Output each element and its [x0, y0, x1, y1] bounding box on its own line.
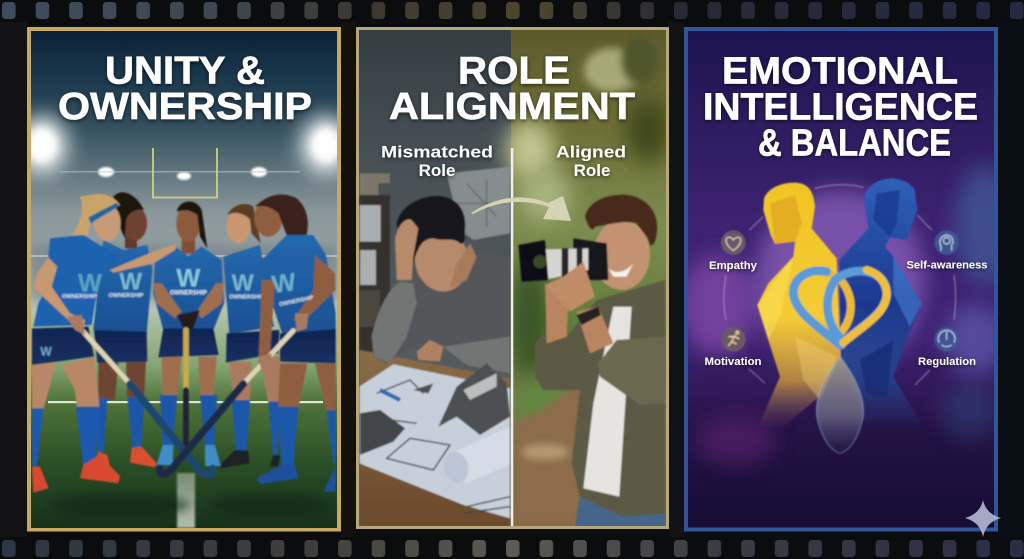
icon: sparkle watermark	[965, 500, 1001, 537]
title: emotional intelligence and balance: & BALANCE	[758, 122, 951, 164]
blueprint sheet	[359, 364, 510, 518]
player 5: OWNERSHIP	[279, 295, 314, 308]
player 3, centre: W	[176, 264, 200, 292]
title: unity and ownership	[58, 50, 312, 128]
panel: role alignment	[358, 28, 670, 528]
label: self-awareness: Self-awareness	[906, 260, 988, 272]
photographer hand and watch	[545, 262, 601, 325]
player 5: W	[270, 268, 298, 299]
label: mismatched role	[381, 142, 493, 180]
player 1: OWNERSHIP	[62, 294, 97, 300]
label: empathy: Empathy	[709, 260, 758, 272]
icon: runner	[728, 331, 739, 346]
title: role alignment: ROLE	[458, 50, 570, 92]
title: emotional intelligence and balance: EMOTIONAL	[722, 50, 958, 92]
title: unity and ownership: UNITY &	[105, 50, 265, 92]
label: mismatched role: Mismatched	[381, 142, 493, 162]
connecting arcs	[724, 185, 956, 385]
player 2: W	[119, 268, 142, 295]
title: role alignment	[389, 50, 635, 128]
aligned side background	[506, 30, 670, 526]
player 1: W	[40, 345, 52, 359]
photographer jacket and body	[535, 280, 665, 527]
player 2: OWNERSHIP	[109, 293, 144, 299]
player 4: OWNERSHIP	[229, 295, 264, 301]
panel frame: blue	[686, 29, 996, 530]
panel frame: olive gold	[358, 28, 668, 528]
panel: emotional intelligence and balance	[680, 29, 1015, 530]
player 4	[220, 204, 280, 469]
title: unity and ownership: OWNERSHIP	[58, 86, 312, 128]
arrow: mismatched to aligned	[471, 196, 571, 221]
nebula background	[680, 165, 1015, 465]
rolled plan	[444, 427, 510, 482]
camera	[518, 238, 608, 282]
photographer arms	[545, 283, 613, 353]
blue figure	[839, 178, 923, 427]
label: aligned role: Aligned	[556, 142, 626, 162]
label: regulation: Regulation	[918, 356, 976, 368]
photographer head	[585, 195, 657, 290]
label: aligned role	[556, 142, 626, 180]
mismatched side background	[359, 30, 511, 526]
player 2	[93, 192, 157, 473]
broken metal model	[360, 363, 510, 455]
panel: unity and ownership	[18, 29, 350, 531]
hands on sticks	[67, 313, 308, 372]
player 4: W	[232, 270, 254, 296]
hockey sticks	[83, 330, 293, 475]
label: aligned role: Role	[574, 161, 610, 180]
player 5	[254, 195, 336, 492]
title: emotional intelligence and balance	[703, 50, 978, 164]
pitch	[31, 309, 337, 531]
divider	[511, 148, 513, 526]
icon: heart	[726, 237, 741, 251]
icon circles	[721, 230, 959, 352]
label: motivation: Motivation	[704, 356, 762, 368]
player 3, centre: OWNERSHIP	[170, 290, 207, 296]
player 1	[32, 194, 177, 493]
goal posts	[153, 148, 217, 198]
stadium background	[18, 31, 350, 311]
icon: head with brain	[940, 235, 953, 251]
shelf with binders	[359, 173, 390, 352]
yellow figure	[757, 183, 841, 427]
frustrated man	[372, 196, 510, 373]
icon: gauge	[938, 330, 955, 347]
wall chart	[447, 167, 510, 240]
player 1: W	[78, 270, 102, 298]
panel frame: gold	[29, 29, 339, 530]
desk	[359, 350, 510, 527]
infinity lower loop	[816, 357, 863, 453]
heart ribbon	[793, 270, 887, 345]
label: mismatched role: Role	[419, 161, 455, 180]
title: emotional intelligence and balance: INTELLIGENCE	[703, 86, 978, 128]
player 3, centre	[153, 201, 224, 466]
title: role alignment: ALIGNMENT	[389, 86, 635, 128]
